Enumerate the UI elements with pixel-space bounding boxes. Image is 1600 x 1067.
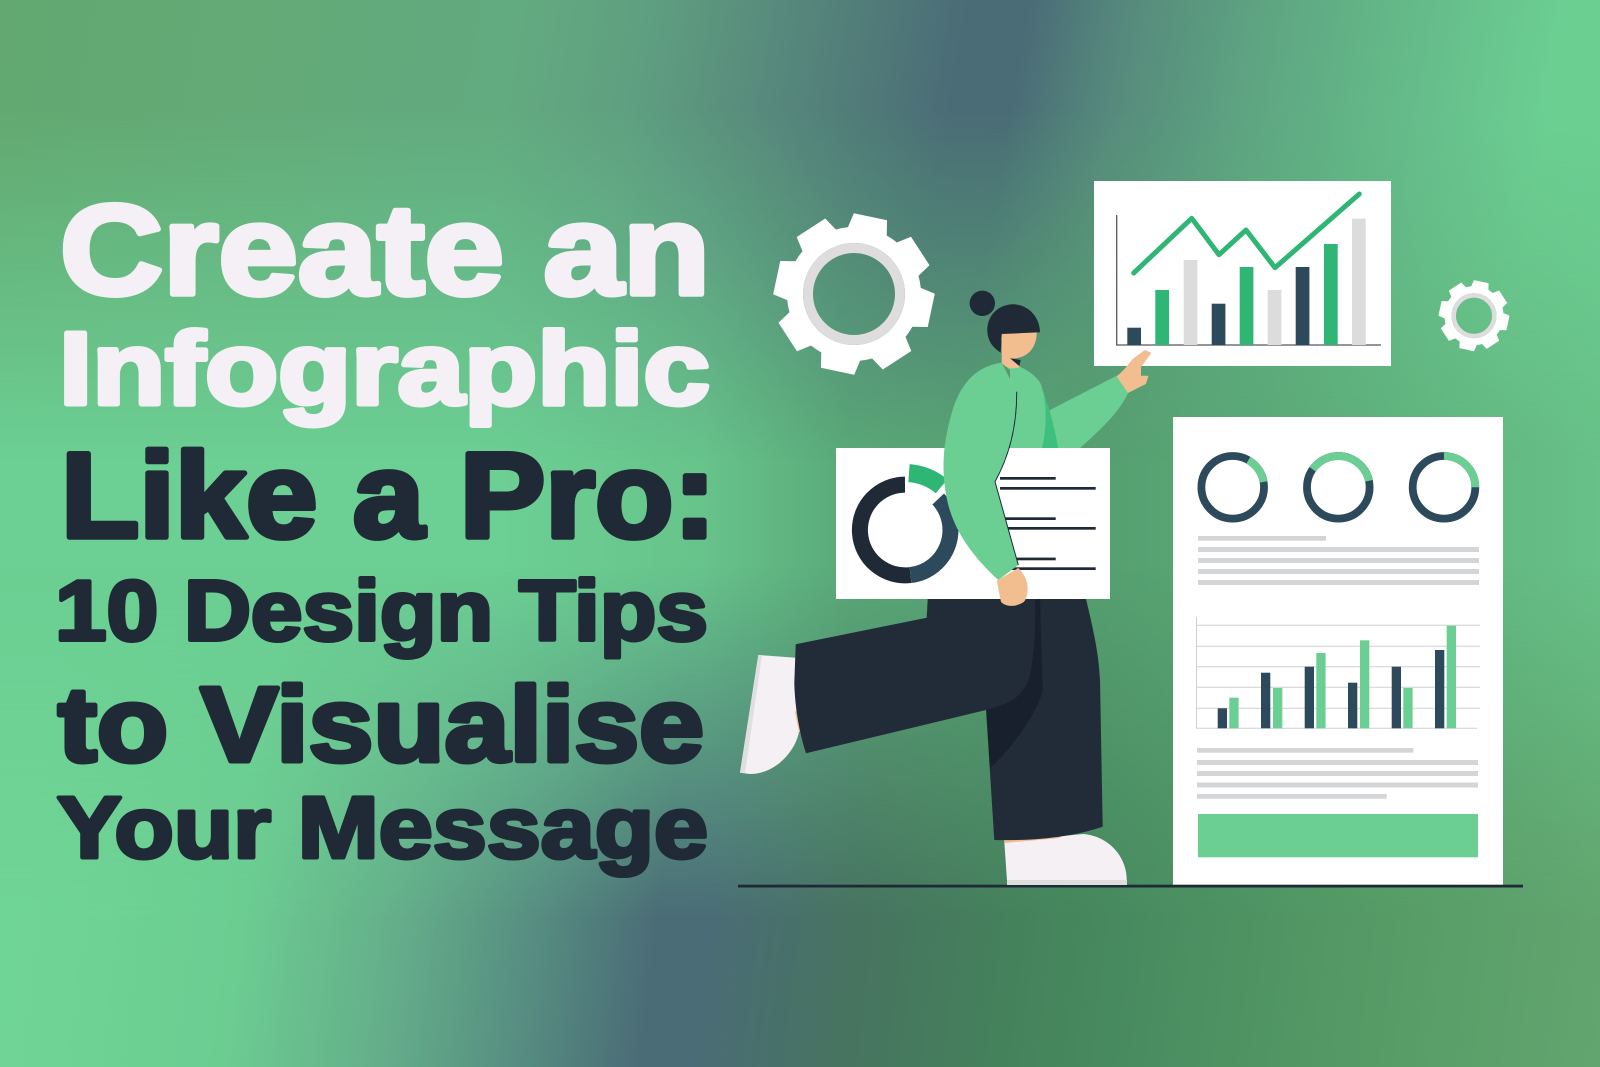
bar chart bbox=[1127, 219, 1366, 345]
ground line bbox=[738, 885, 1523, 888]
heading line: Infographic: Infographic bbox=[59, 311, 710, 426]
donut chart 3 bbox=[1413, 456, 1475, 519]
panel: small donut card bbox=[836, 448, 1110, 599]
card text lines bbox=[1000, 477, 1096, 570]
sweater torso bbox=[1002, 363, 1058, 448]
trend line bbox=[1134, 194, 1359, 273]
heading line: Your Message: Your Message bbox=[57, 780, 708, 876]
panel: line and bar chart card bbox=[1094, 181, 1391, 366]
figure: woman presenting charts bbox=[740, 291, 1150, 885]
upper text placeholder lines bbox=[1198, 536, 1479, 585]
head bbox=[987, 304, 1040, 368]
pointing hand bbox=[1118, 351, 1150, 392]
heading line: to Visualise: to Visualise bbox=[58, 666, 704, 784]
title bbox=[55, 179, 716, 876]
card donut chart bbox=[860, 473, 950, 575]
holding arm bbox=[943, 363, 1028, 606]
heading line: 10 Design Tips: 10 Design Tips bbox=[55, 564, 708, 659]
donut chart 2 bbox=[1307, 456, 1370, 519]
icon: large gear bbox=[772, 212, 936, 376]
pointing arm bbox=[1040, 351, 1150, 448]
trousers bbox=[794, 599, 1103, 840]
front shoe bbox=[1004, 834, 1127, 885]
donut chart 1 bbox=[1201, 456, 1264, 519]
holding hand bbox=[997, 568, 1028, 606]
green call-to-action bar bbox=[1198, 814, 1478, 857]
icon: small gear bbox=[1438, 280, 1510, 352]
lower text placeholder lines bbox=[1197, 748, 1478, 799]
heading line: Like a Pro:: Like a Pro: bbox=[61, 427, 716, 563]
hair bun bbox=[970, 291, 995, 316]
back shoe bbox=[740, 655, 803, 774]
panel: report document bbox=[1173, 417, 1503, 885]
chart axes bbox=[1117, 215, 1381, 345]
grouped bar chart bbox=[1196, 617, 1480, 728]
heading line: Create an: Create an bbox=[60, 179, 710, 322]
